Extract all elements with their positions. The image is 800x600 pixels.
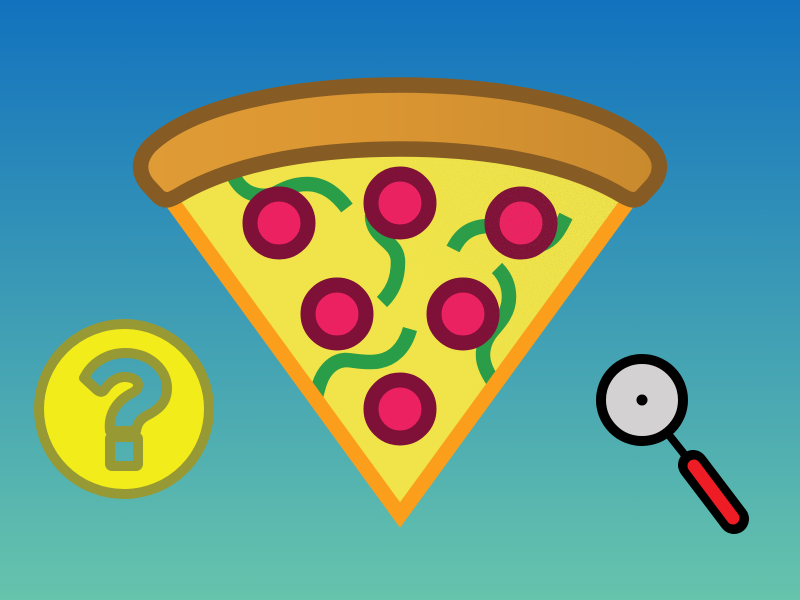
question mark dot <box>110 437 138 466</box>
cheese base <box>172 130 628 513</box>
question mark hook <box>84 353 167 431</box>
cheese grain <box>406 158 618 330</box>
handle grip <box>694 466 733 518</box>
cutter handle <box>693 465 734 519</box>
crust <box>141 85 659 200</box>
icon: pizza cutter <box>601 359 734 519</box>
icon: question mark badge <box>39 324 209 494</box>
cutter wheel <box>601 359 683 441</box>
pepperoni slices <box>250 174 550 438</box>
badge circle <box>39 324 209 494</box>
orange crust edge <box>173 203 627 515</box>
cutter shaft <box>665 430 692 464</box>
pizza slice <box>141 85 659 515</box>
wheel hub <box>636 394 648 406</box>
basil strands <box>234 177 566 400</box>
